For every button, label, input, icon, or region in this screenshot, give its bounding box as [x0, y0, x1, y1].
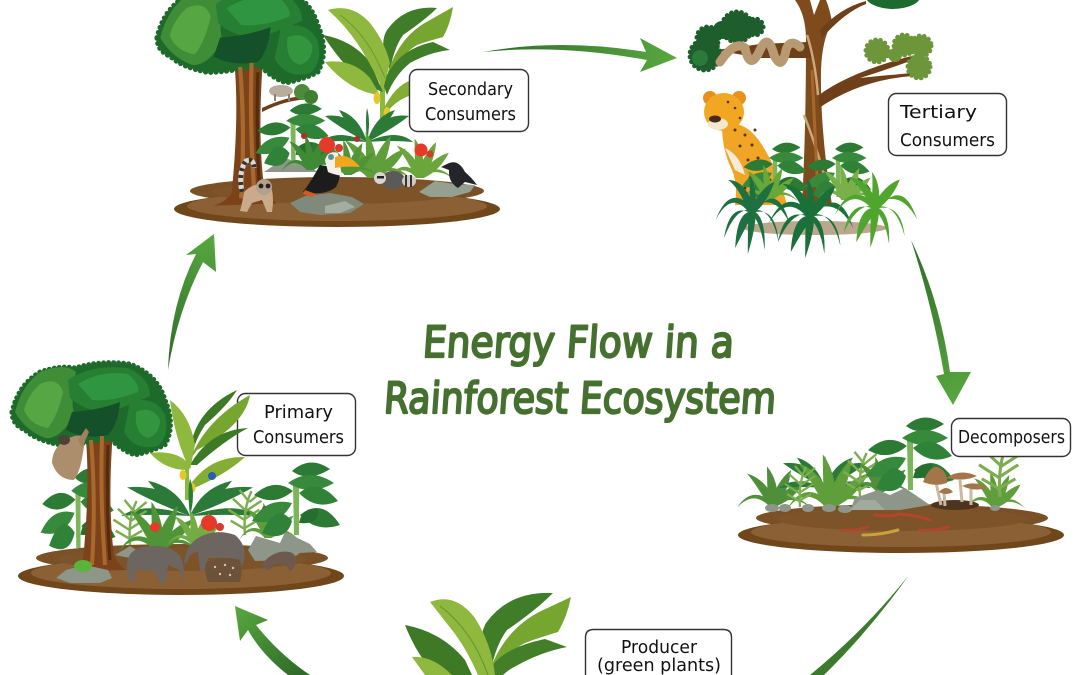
ferns and grass: primary	[114, 479, 298, 552]
tree: tertiary	[715, 0, 915, 205]
lemur	[240, 160, 273, 212]
leopard	[703, 91, 787, 205]
rocks behind	[264, 158, 360, 172]
ground: tertiary	[743, 221, 887, 235]
label: secondary consumers: Consumers	[425, 104, 516, 125]
label: decomposers: Decomposers	[958, 427, 1065, 448]
label: secondary consumers: Secondary	[428, 79, 513, 100]
raccoon	[374, 171, 416, 189]
foliage: dark left	[690, 12, 763, 70]
foliage: olive right	[866, 35, 931, 78]
ground: secondary consumers	[174, 177, 500, 227]
rock under crow	[419, 181, 475, 197]
arrow: decomposers to producer	[810, 575, 909, 675]
toucan	[303, 152, 360, 197]
label: tertiary consumers	[888, 94, 1006, 156]
ground: primary	[18, 544, 344, 595]
mushrooms	[923, 467, 987, 510]
foliage: top	[865, 0, 921, 9]
tree: primary	[12, 363, 170, 572]
rocks: decomposers	[765, 488, 1000, 513]
tree	[157, 0, 324, 206]
crow	[441, 162, 477, 188]
label: producer	[586, 630, 732, 675]
sloth	[52, 428, 89, 480]
tapir baby	[205, 558, 242, 582]
scene: secondary consumers	[157, 0, 500, 227]
left plant: primary	[41, 468, 115, 549]
plants behind toucan	[256, 103, 454, 180]
title	[382, 318, 778, 424]
right plant: primary	[252, 462, 340, 536]
plants: decomposers	[737, 417, 1025, 509]
rock under toucan	[290, 193, 364, 215]
arrow: primary to secondary	[168, 234, 216, 370]
arrow: tertiary to decomposers	[911, 240, 971, 405]
title: Energy Flow in a	[421, 318, 736, 368]
label: tertiary consumers: Tertiary	[899, 102, 977, 123]
label: tertiary consumers: Consumers	[900, 130, 995, 151]
arrow: producer to primary	[235, 606, 310, 675]
label: decomposers	[952, 418, 1070, 456]
tapir adult back	[184, 532, 245, 572]
frog and rock	[56, 560, 112, 583]
rocks: primary	[115, 532, 317, 561]
arrow: secondary to tertiary	[483, 38, 677, 72]
scene: tertiary consumers	[690, 0, 931, 258]
label: producer: Producer	[621, 637, 698, 658]
snake	[720, 42, 800, 62]
label: primary consumers: Consumers	[253, 427, 344, 448]
banana plant	[323, 7, 453, 124]
undergrowth: tertiary	[716, 143, 917, 258]
worms	[841, 514, 949, 535]
label: secondary consumers	[410, 70, 528, 132]
scene: decomposers	[737, 417, 1064, 553]
ground: decomposers	[738, 504, 1064, 553]
label: primary consumers: Primary	[264, 402, 333, 423]
label: primary consumers	[238, 394, 356, 456]
banana plant: primary	[150, 390, 250, 500]
tapir adult front	[127, 546, 184, 583]
branch with small animal	[262, 84, 318, 112]
scene: primary consumers	[12, 363, 356, 595]
banana plant: producer	[405, 593, 571, 675]
small animal	[262, 552, 296, 571]
title: Rainforest Ecosystem	[382, 374, 778, 424]
